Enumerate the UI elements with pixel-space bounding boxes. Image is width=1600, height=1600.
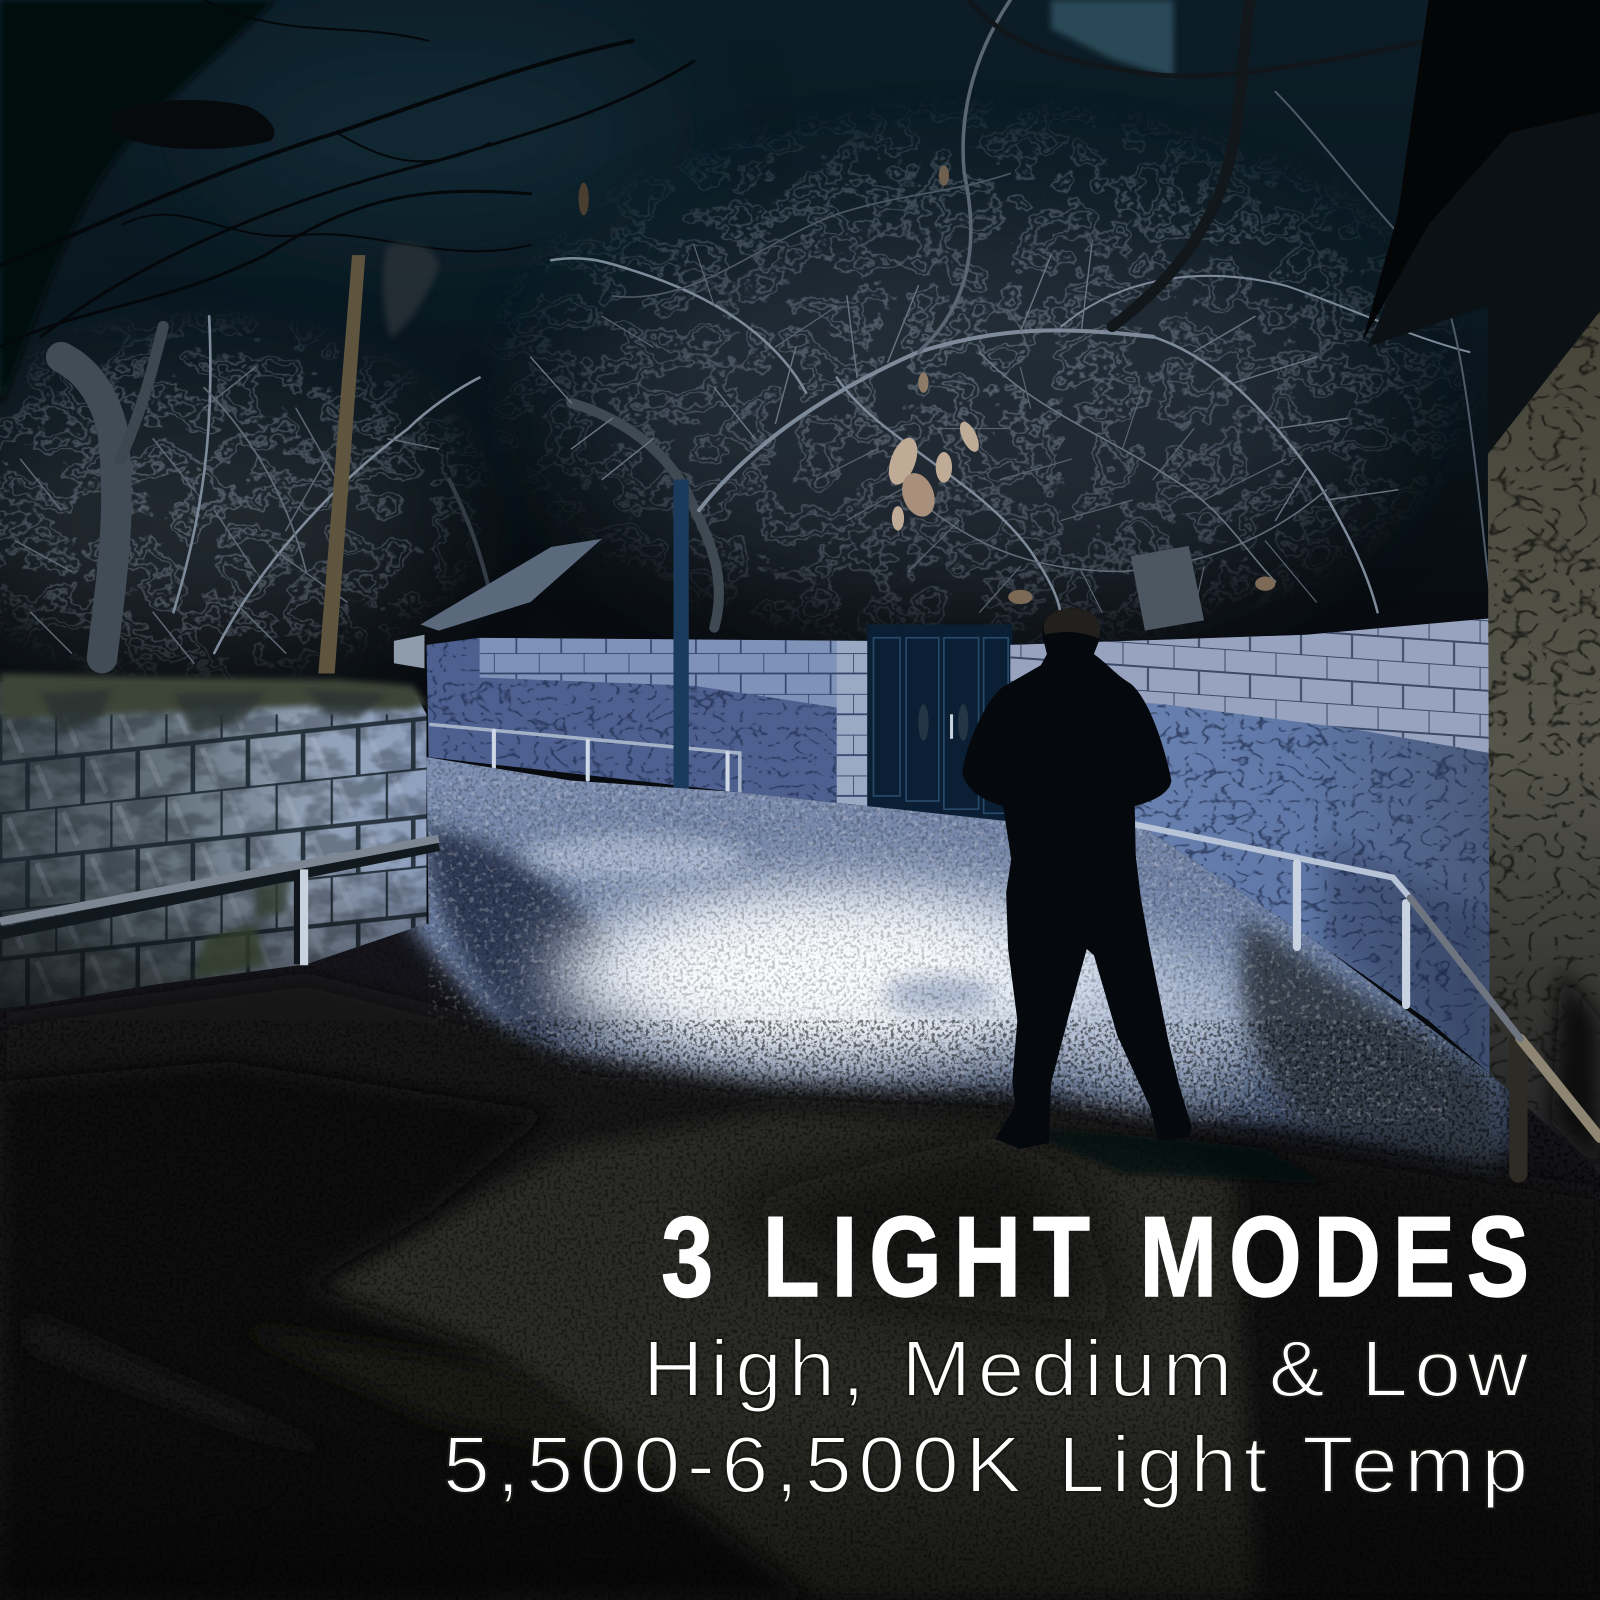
back wall handrail xyxy=(431,724,740,798)
tree canopy with lit twigs xyxy=(0,0,1600,714)
back wall xyxy=(426,638,868,806)
moss cap on wall xyxy=(0,673,427,735)
headline text block xyxy=(443,1194,1541,1509)
utility pole, shed roof and slab xyxy=(318,243,1204,673)
right wall handrail xyxy=(1135,824,1600,1173)
dark foreground ground xyxy=(6,1000,1594,1192)
right wall xyxy=(1000,612,1500,1092)
person silhouette holding flashlight xyxy=(962,608,1327,1184)
left stone wall xyxy=(0,673,439,1020)
gate xyxy=(867,624,1012,824)
hanging dry leaves xyxy=(579,165,1276,604)
road and ground xyxy=(0,714,1600,1600)
subtitle: high, medium and low: High, Medium & Low xyxy=(643,1324,1535,1413)
street lamp post xyxy=(673,480,689,802)
far right stone wall and roof xyxy=(1362,0,1600,1184)
left wall handrail xyxy=(0,839,439,965)
subtitle: light temperature: 5,500-6,500K Light Temp xyxy=(443,1420,1535,1509)
